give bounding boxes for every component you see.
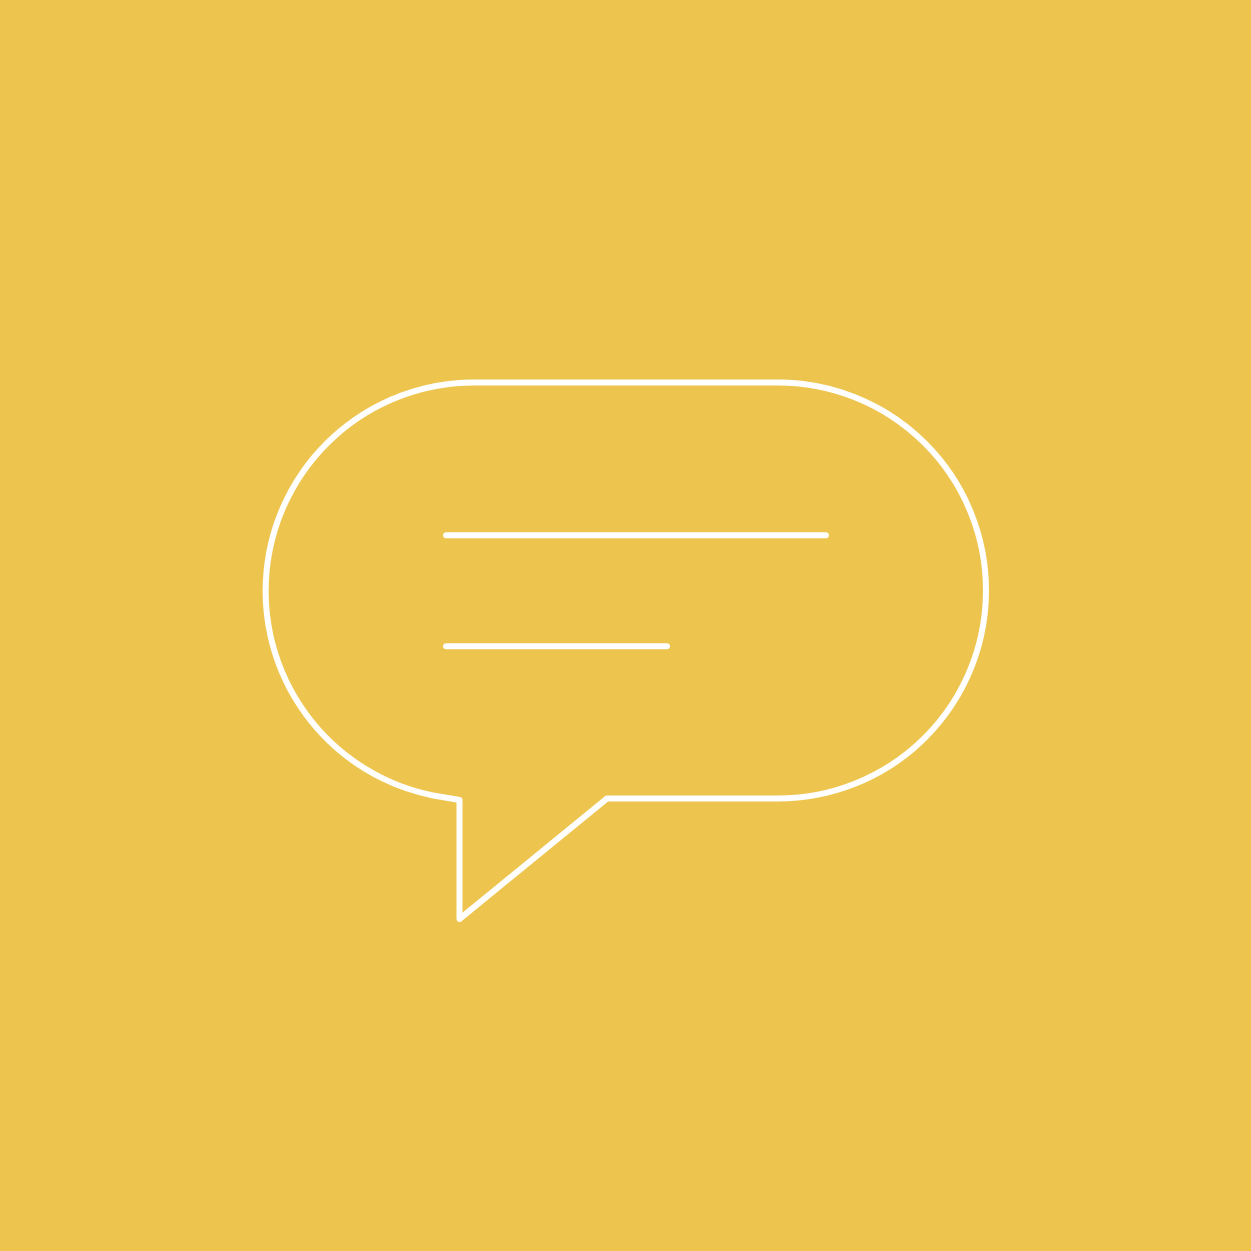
icon: speech bubble outline <box>266 382 986 919</box>
text line: short <box>446 643 667 649</box>
text line: long <box>446 532 826 538</box>
